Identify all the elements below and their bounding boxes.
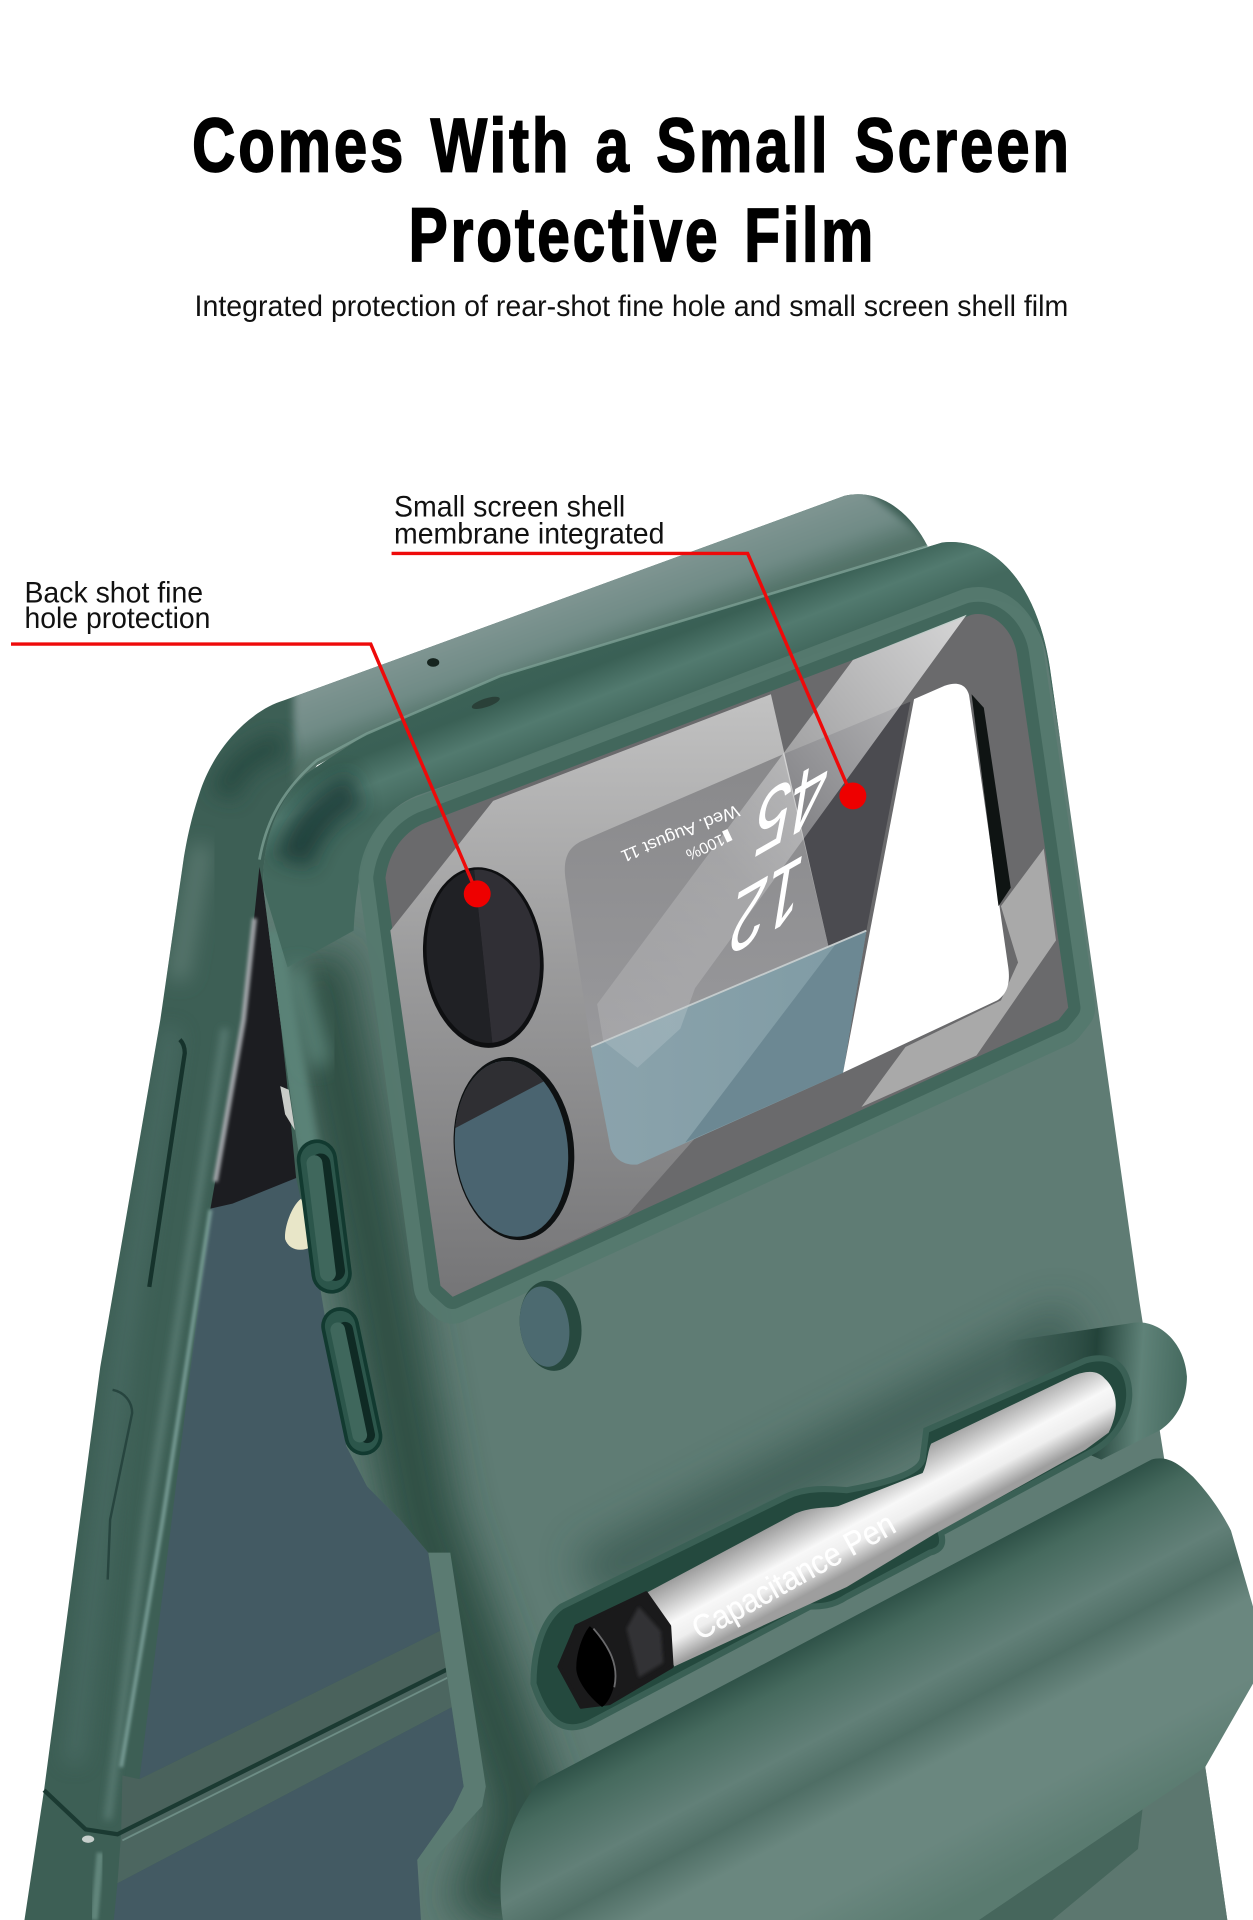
callout: small screen shell membrane integrated: Small screen shell <box>394 491 625 524</box>
black inner edge <box>972 694 1011 906</box>
date text: Wed. August 11 <box>618 801 742 867</box>
side highlight line <box>121 1210 210 1767</box>
lower strap band <box>500 1458 1253 1920</box>
lower side panel <box>114 1687 489 1920</box>
rear camera top lens <box>414 861 552 1054</box>
time digits 12: 12 <box>722 834 810 978</box>
window cutout <box>843 684 1009 1073</box>
lower side panel strip <box>117 1648 489 1883</box>
main case body <box>263 542 1227 1920</box>
pen label: Capacitance Pen <box>686 1506 902 1648</box>
hinge silver detail <box>280 1086 295 1130</box>
speaker slot <box>470 694 501 711</box>
volume button lower <box>338 1326 367 1436</box>
callout: back shot fine hole protection: Back shot fine <box>24 576 203 609</box>
time digits 45: 45 <box>747 736 834 880</box>
dark sliver of inner screen <box>210 867 296 1209</box>
flash hole <box>514 1277 587 1375</box>
right gloss band <box>861 849 1056 1107</box>
light glass region <box>390 694 836 1297</box>
area under strap <box>979 1767 1227 1920</box>
callout: small screen shell membrane integrated: membrane integrated <box>394 518 664 551</box>
cover screen lower <box>591 931 866 1165</box>
phone case illustration <box>24 484 1253 1920</box>
title: Protective Film <box>409 193 876 278</box>
fold line <box>591 931 866 1047</box>
callout: small screen shell membrane integrated <box>392 491 866 809</box>
rear shading <box>73 484 942 1820</box>
pen barrel <box>646 1372 1116 1667</box>
rear camera bottom lens <box>454 1057 574 1240</box>
battery text: ▮100% <box>683 826 735 863</box>
pen tip <box>559 1593 672 1707</box>
dark area behind glass <box>783 702 910 953</box>
callout: back shot fine hole protection: hole protection <box>24 602 210 635</box>
microphone dot <box>427 658 439 667</box>
pen slot <box>534 1358 1129 1727</box>
seam highlight <box>259 546 928 860</box>
hinge camera glint <box>285 1199 312 1250</box>
volume button upper <box>314 1160 335 1273</box>
title <box>192 103 1072 278</box>
left rim strip <box>417 1553 486 1873</box>
side screen panel <box>139 1178 489 1779</box>
body shading <box>263 542 1077 1920</box>
pen clip top <box>979 1322 1187 1460</box>
glass frame rim <box>385 614 1068 1297</box>
hinge line <box>44 1660 465 1920</box>
folded phone rear silhouette <box>24 494 928 1920</box>
side buttons <box>108 1040 185 1580</box>
glass reflection band <box>597 615 967 1068</box>
subtitle: Integrated protection of rear-shot fine hole and small screen shell film <box>195 290 1068 323</box>
capacitive pen <box>559 1372 1116 1707</box>
panel strip above hinge <box>121 1607 489 1833</box>
callout: back shot fine hole protection <box>11 576 491 907</box>
glass protector <box>385 614 1068 1297</box>
top rim band <box>263 542 1067 967</box>
cover screen upper <box>565 754 828 1047</box>
